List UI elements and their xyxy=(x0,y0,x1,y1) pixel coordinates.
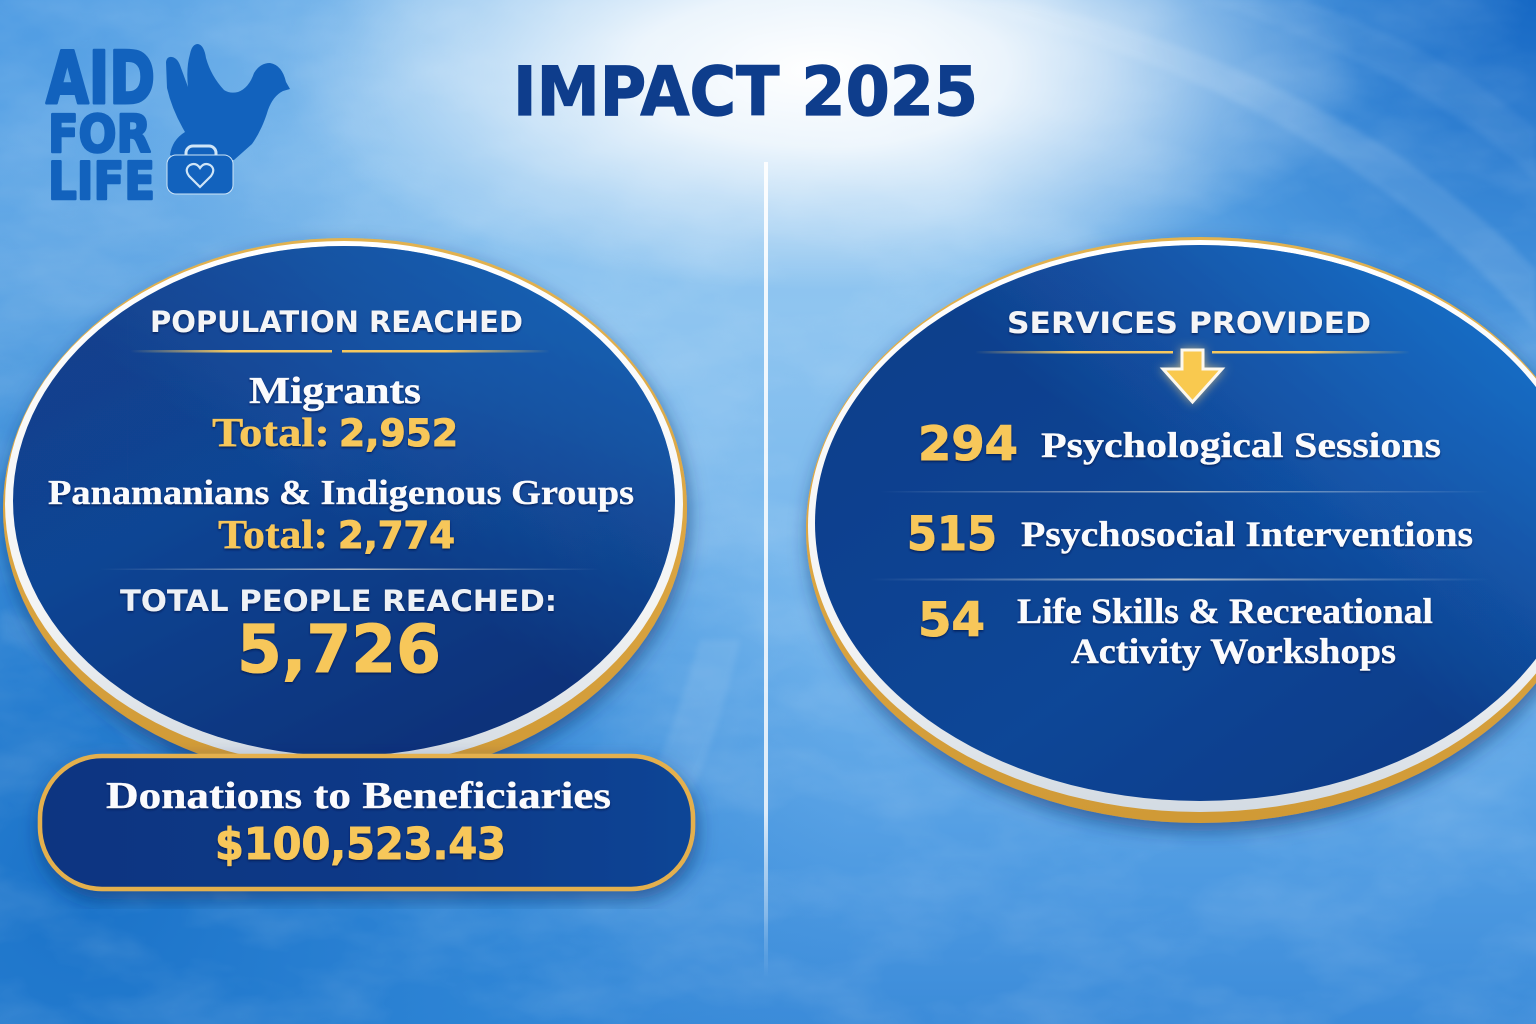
heading: population reached: POPULATION REACHED xyxy=(150,305,523,339)
panel frame: right ellipse xyxy=(806,237,1536,823)
heading underline xyxy=(975,351,1410,354)
service row: psychosocial interventions xyxy=(907,507,1473,562)
logo: Aid for Life xyxy=(46,36,290,212)
service row: psychosocial interventions: 515 xyxy=(907,507,997,562)
stat: panamanians and indigenous groups: 2,774 xyxy=(338,514,455,557)
service row: psychological sessions xyxy=(918,417,1441,472)
panel: services provided xyxy=(806,237,1536,823)
panel: population reached xyxy=(3,238,687,780)
logo wordmark: FOR xyxy=(48,105,151,165)
stat: total people reached: TOTAL PEOPLE REACHED: xyxy=(120,584,557,618)
icon: medical case with heart xyxy=(167,146,233,194)
panel: donations to beneficiaries xyxy=(40,756,693,889)
service row: life skills workshops: Life Skills & Recreational xyxy=(1017,591,1433,631)
logo wordmark: AID xyxy=(46,36,155,120)
stat: total people reached xyxy=(120,584,557,688)
service row: life skills workshops: 54 xyxy=(918,593,985,648)
stat: migrants: 2,952 xyxy=(339,412,458,455)
icon: dove xyxy=(166,44,290,160)
title: IMPACT 2025 xyxy=(513,53,978,132)
center divider line xyxy=(764,162,768,977)
panel frame: left ellipse xyxy=(3,238,687,780)
pill frame xyxy=(40,756,693,889)
stat: migrants: Migrants xyxy=(249,370,421,412)
service row: psychosocial interventions: Psychosocial Interventions xyxy=(1021,514,1473,554)
logo wordmark xyxy=(46,36,155,212)
stat: panamanians and indigenous groups: Panamanians & Indigenous Groups xyxy=(48,473,634,512)
heading: services provided: SERVICES PROVIDED xyxy=(1007,306,1371,340)
stat: migrants: Total: xyxy=(212,409,330,455)
stat: panamanians and indigenous groups: Total: xyxy=(218,511,328,557)
stat: total people reached: 5,726 xyxy=(237,611,441,688)
icon: down arrow xyxy=(1163,350,1222,402)
service row: life skills workshops: Activity Workshops xyxy=(1071,631,1396,671)
donations amount: $100,523.43 xyxy=(215,819,506,870)
service row: life skills workshops xyxy=(918,591,1433,671)
service row: psychological sessions: Psychological Sessions xyxy=(1041,425,1441,465)
donations label: Donations to Beneficiaries xyxy=(106,775,611,817)
heading underline xyxy=(130,350,550,352)
stat: panamanians and indigenous groups xyxy=(48,473,634,557)
service row: psychological sessions: 294 xyxy=(918,417,1018,472)
stat: migrants xyxy=(212,370,458,455)
logo wordmark: LIFE xyxy=(48,152,155,212)
